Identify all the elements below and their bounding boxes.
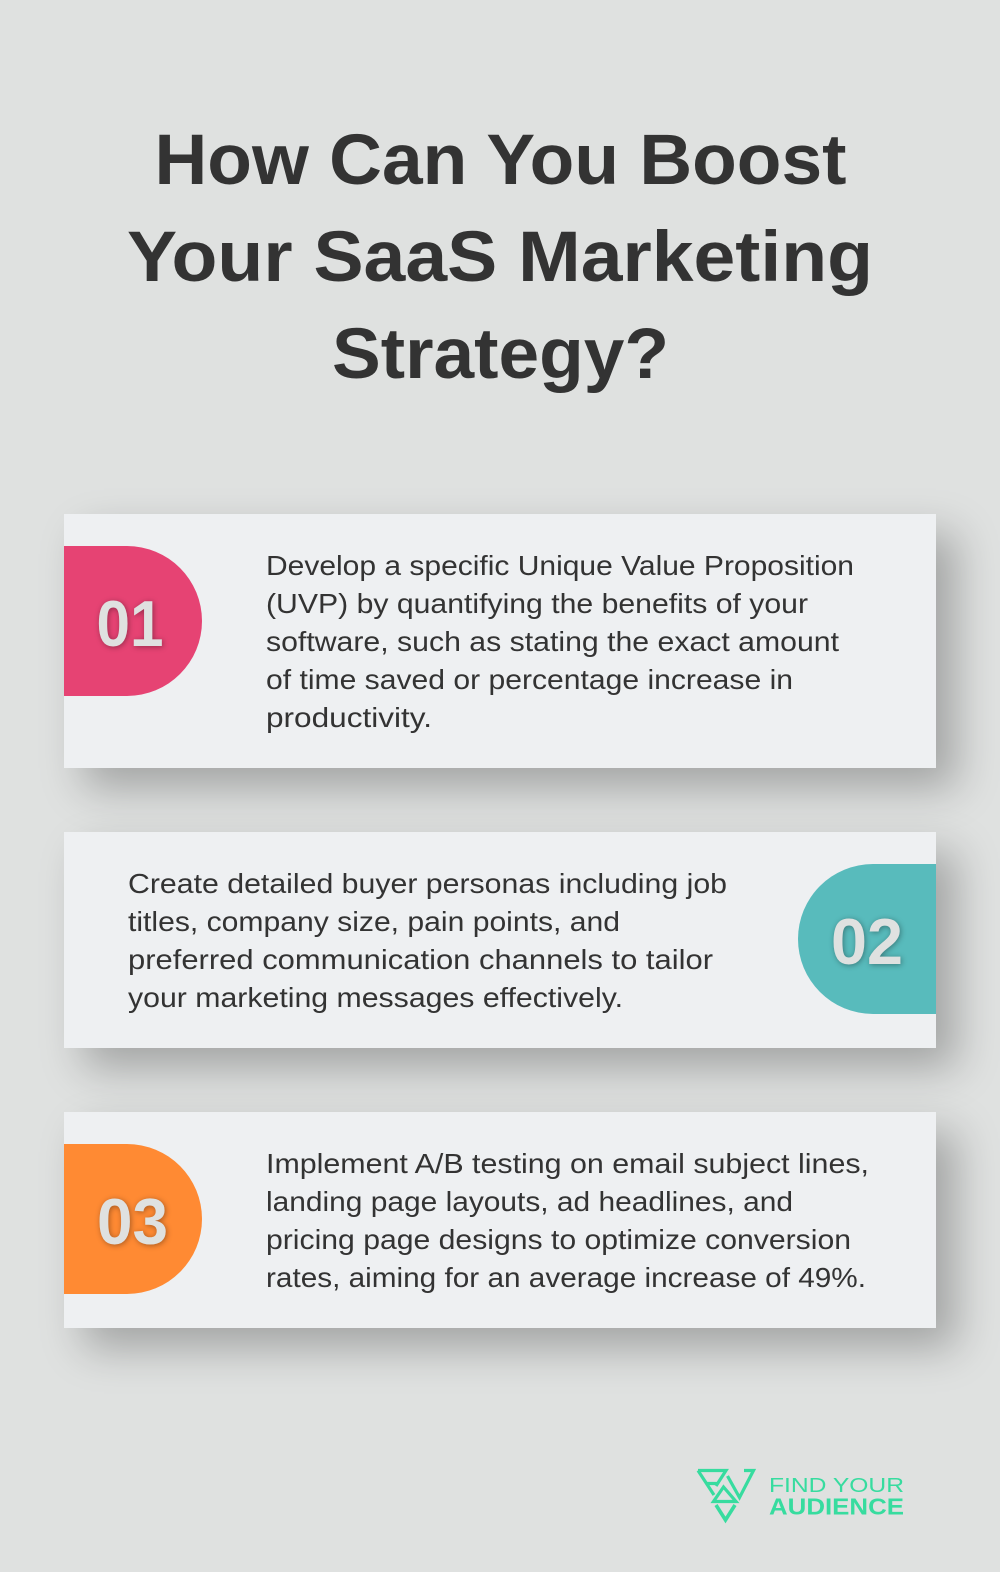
text: step 1: (UVP) by quantifying the benefits of your <box>266 588 808 619</box>
text: step 2: preferred communication channels to tailor <box>128 944 713 975</box>
text: step 2 <box>128 868 727 1013</box>
panel: card 2 background <box>64 832 936 1048</box>
text: step 1: productivity. <box>266 702 432 733</box>
text: step 1 <box>266 550 854 733</box>
title <box>127 121 873 394</box>
panel: card 3 background <box>64 1112 936 1328</box>
badge 02: 02 <box>831 905 903 978</box>
text: step 3: rates, aiming for an average increase of 49%. <box>266 1262 866 1293</box>
title: Strategy? <box>332 315 669 394</box>
badge 01 <box>64 546 202 696</box>
badge 02 <box>798 864 936 1014</box>
text: step 1: Develop a specific Unique Value Proposition <box>266 550 854 581</box>
logo wordmark: FIND YOUR <box>769 1474 904 1497</box>
icon: triangle monogram <box>698 1470 754 1520</box>
badge 03: 03 <box>97 1185 168 1258</box>
logo wordmark: AUDIENCE <box>769 1494 904 1520</box>
logo wordmark <box>769 1474 904 1520</box>
text: step 2: your marketing messages effectively. <box>128 982 623 1013</box>
text: step 3: landing page layouts, ad headlines, and <box>266 1186 793 1217</box>
text: step 3: pricing page designs to optimize conversion <box>266 1224 851 1255</box>
badge 01: 01 <box>96 587 164 660</box>
panel: card 1 background <box>64 514 936 768</box>
text: step 1: of time saved or percentage increase in <box>266 664 793 695</box>
logo: Find Your Audience <box>698 1470 904 1520</box>
badge 03 <box>64 1144 202 1294</box>
text: step 2: Create detailed buyer personas including job <box>128 868 727 899</box>
text: step 1: software, such as stating the exact amount <box>266 626 839 657</box>
text: step 3 <box>266 1148 869 1293</box>
title: How Can You Boost <box>154 121 846 200</box>
text: step 3: Implement A/B testing on email subject lines, <box>266 1148 869 1179</box>
title: Your SaaS Marketing <box>127 218 873 297</box>
text: step 2: titles, company size, pain points, and <box>128 906 620 937</box>
